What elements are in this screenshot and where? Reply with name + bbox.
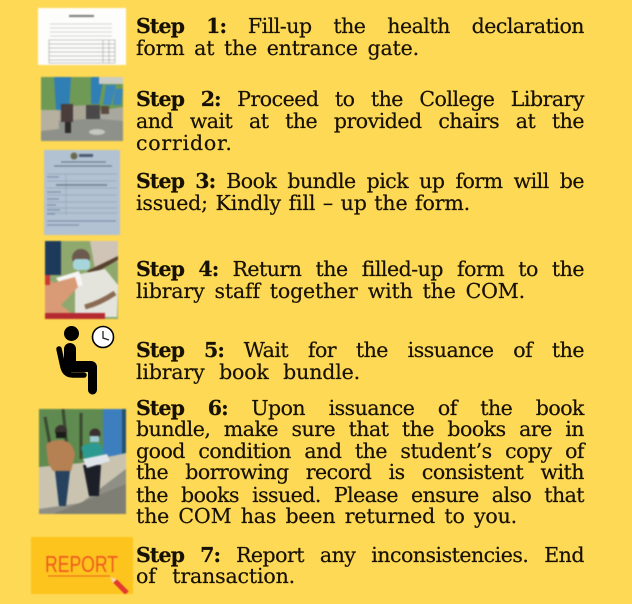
photo: two students with books [38,408,127,515]
photo: health declaration form [37,7,127,66]
step 3: Step 3: Book bundle pick up form will be [136,169,584,193]
step 4 text [136,257,584,303]
step 7 text [136,543,584,588]
photo: staff receiving form [44,240,119,320]
step 3: issued; Kindly fill – up the form. [136,191,470,215]
step 6 text [136,396,586,528]
step 6: the borrowing record is consistent with [136,460,584,484]
photo: corridor chairs [40,76,124,142]
step 6: Step 6: Upon issuance of the book [136,396,584,420]
step 1: form at the entrance gate. [136,36,419,60]
step 2: Step 2: Proceed to the College Library [136,87,584,111]
step 6: bundle, make sure that the books are in [136,417,584,441]
step 6: the COM has been returned to you. [136,504,517,528]
photo: book bundle pick up form [43,149,121,236]
step 7: Step 7: Report any inconsistencies. End [136,543,584,567]
step 6: good condition and the student’s copy of [136,439,584,463]
step 7: of transaction. [136,564,295,588]
icon: report sticker with pencil [30,536,134,595]
step 1 text [136,14,584,60]
step 2 text [136,87,584,155]
step 3 text [136,169,584,215]
step 6: the books issued. Please ensure also that [136,483,584,507]
step 5: library book bundle. [136,360,360,384]
step 2: corridor. [136,131,233,155]
step 5: Step 5: Wait for the issuance of the [136,338,584,362]
step 4: Step 4: Return the filled-up form to the [136,257,584,281]
step 2: and wait at the provided chairs at the [136,109,584,133]
step 4: library staff together with the COM. [136,279,525,303]
step 1: Step 1: Fill-up the health declaration [136,14,584,38]
icon: seated person with clock [56,326,114,394]
step 5 text [136,338,584,384]
